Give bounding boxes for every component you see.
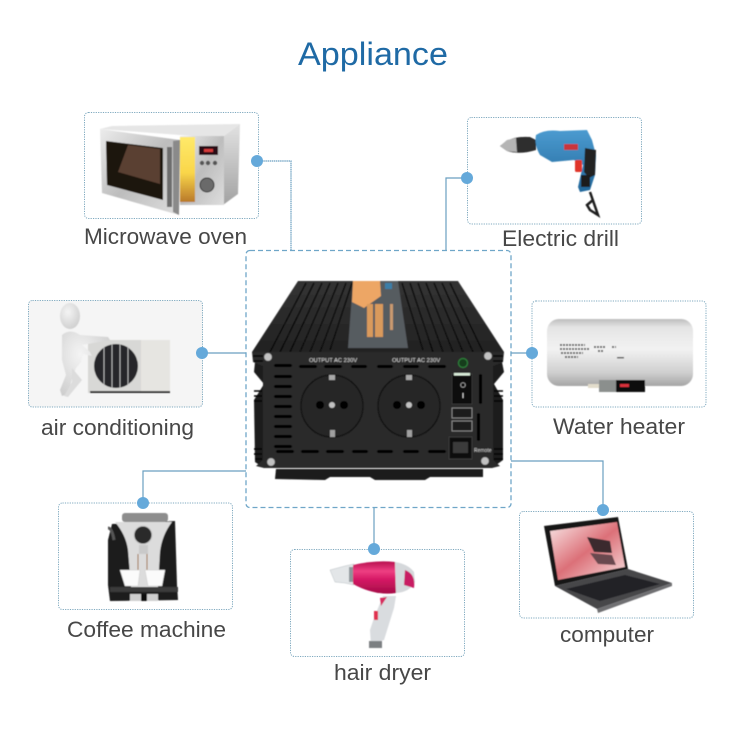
panel: coffee machine xyxy=(58,503,232,610)
remote port: Remote xyxy=(474,448,492,454)
remote port xyxy=(449,437,492,459)
icon: coffee machine xyxy=(108,513,178,601)
mounting foot xyxy=(275,469,483,480)
central dashed frame xyxy=(246,250,511,508)
inverter front plate xyxy=(252,352,504,468)
output labels: OUTPUT AC 230V xyxy=(392,358,440,364)
output labels xyxy=(309,358,440,364)
orange label stripe xyxy=(352,281,381,308)
label: hair dryer: hair dryer xyxy=(334,660,431,685)
USB ports xyxy=(452,408,472,431)
connector dot: air conditioning xyxy=(196,347,208,359)
connector: air conditioning xyxy=(202,352,246,354)
icon: hair dryer xyxy=(330,561,415,648)
inverter top fins xyxy=(270,283,483,352)
side slots xyxy=(477,374,482,441)
icon: laptop xyxy=(544,517,672,613)
connector: coffee machine xyxy=(143,471,246,503)
side fin stripes xyxy=(253,356,503,459)
panel: electric drill xyxy=(468,118,642,224)
panel: water heater xyxy=(532,301,706,407)
inverter top heat sink xyxy=(252,281,504,352)
icon: figure with AC unit xyxy=(60,303,170,397)
inverter product image xyxy=(252,281,504,480)
left vent slots xyxy=(274,364,292,448)
inverter top label xyxy=(348,281,408,348)
connector: microwave oven xyxy=(257,161,291,250)
connector: electric drill xyxy=(446,178,467,250)
connector dot: computer xyxy=(597,504,609,516)
connector dot: microwave xyxy=(251,155,263,167)
icon: electric drill xyxy=(500,130,598,215)
connector dot: water heater xyxy=(526,347,538,359)
top and bottom vent slots xyxy=(276,365,446,453)
power LED xyxy=(458,358,468,368)
inverter side fins xyxy=(254,352,504,468)
panel: computer xyxy=(520,512,694,618)
label: computer: computer xyxy=(560,622,654,647)
connector: computer xyxy=(511,461,603,510)
label: water heater: Water heater xyxy=(553,414,685,439)
panel: air conditioning xyxy=(28,300,202,407)
icon: water heater xyxy=(547,319,693,392)
panel: microwave oven xyxy=(84,112,258,218)
connector dot: electric drill xyxy=(461,172,473,184)
title: Appliance xyxy=(298,36,448,72)
mounting screws xyxy=(264,352,492,466)
label: microwave oven: Microwave oven xyxy=(84,224,247,249)
connector: hair dryer xyxy=(373,507,375,549)
icon: microwave oven xyxy=(100,124,240,215)
rocker switch xyxy=(452,373,472,404)
connector dot: coffee machine xyxy=(137,497,149,509)
right socket xyxy=(373,374,449,446)
connector dot: hair dryer xyxy=(368,543,380,555)
label: coffee machine: Coffee machine xyxy=(67,617,226,642)
left socket xyxy=(294,374,369,446)
label: electric drill: Electric drill xyxy=(502,226,619,251)
connector: water heater xyxy=(511,352,532,354)
output labels: OUTPUT AC 230V xyxy=(309,358,357,364)
panel: hair dryer xyxy=(290,550,464,656)
label: air conditioning: air conditioning xyxy=(41,415,194,440)
